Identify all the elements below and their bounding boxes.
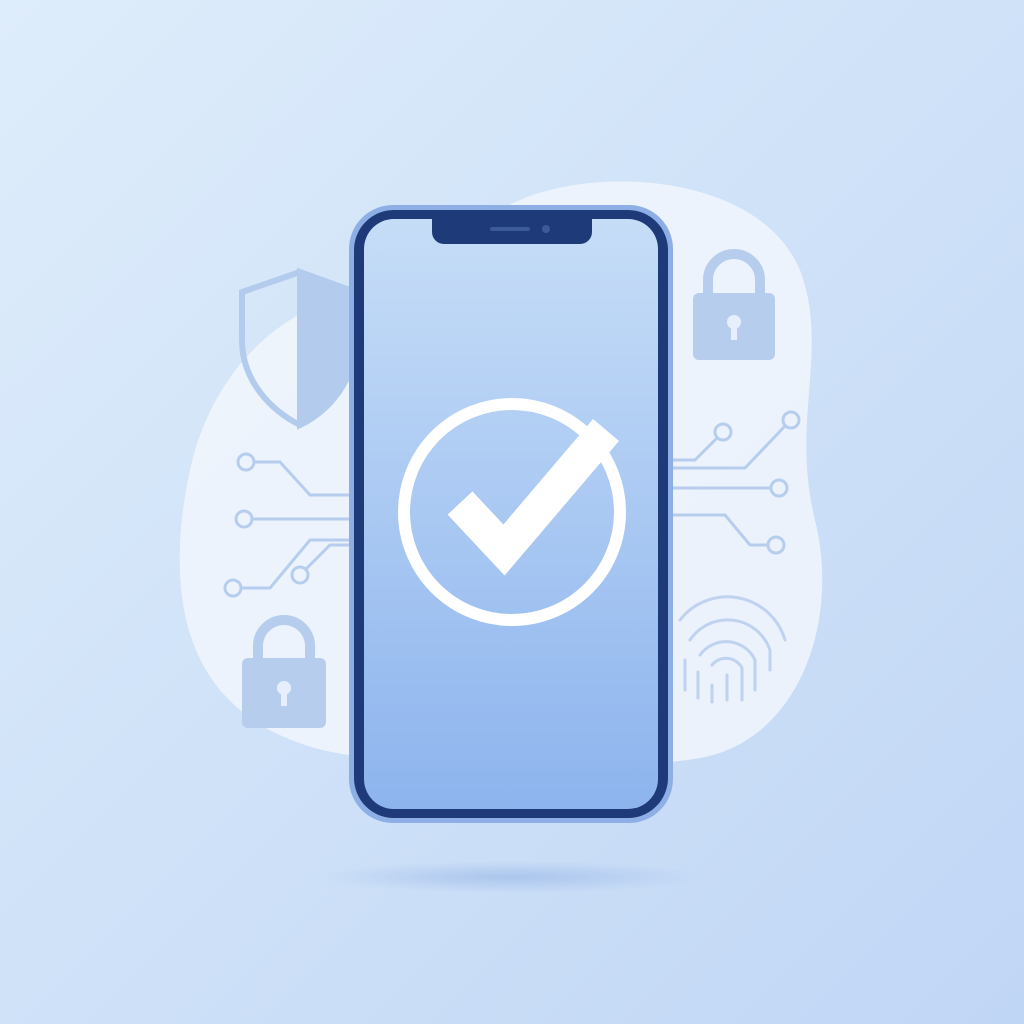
phone [349, 205, 673, 823]
screen [364, 219, 658, 809]
circuit left [225, 454, 352, 596]
notch [432, 218, 592, 244]
icon: lock bottom left [242, 620, 326, 728]
circuit right [672, 412, 799, 553]
shadow [322, 861, 702, 893]
icon: fingerprint [680, 597, 785, 702]
icon: lock top right [693, 254, 775, 360]
background blob [180, 181, 822, 763]
check circle [404, 404, 620, 620]
checkmark [460, 430, 606, 550]
icon: shield [242, 272, 355, 425]
